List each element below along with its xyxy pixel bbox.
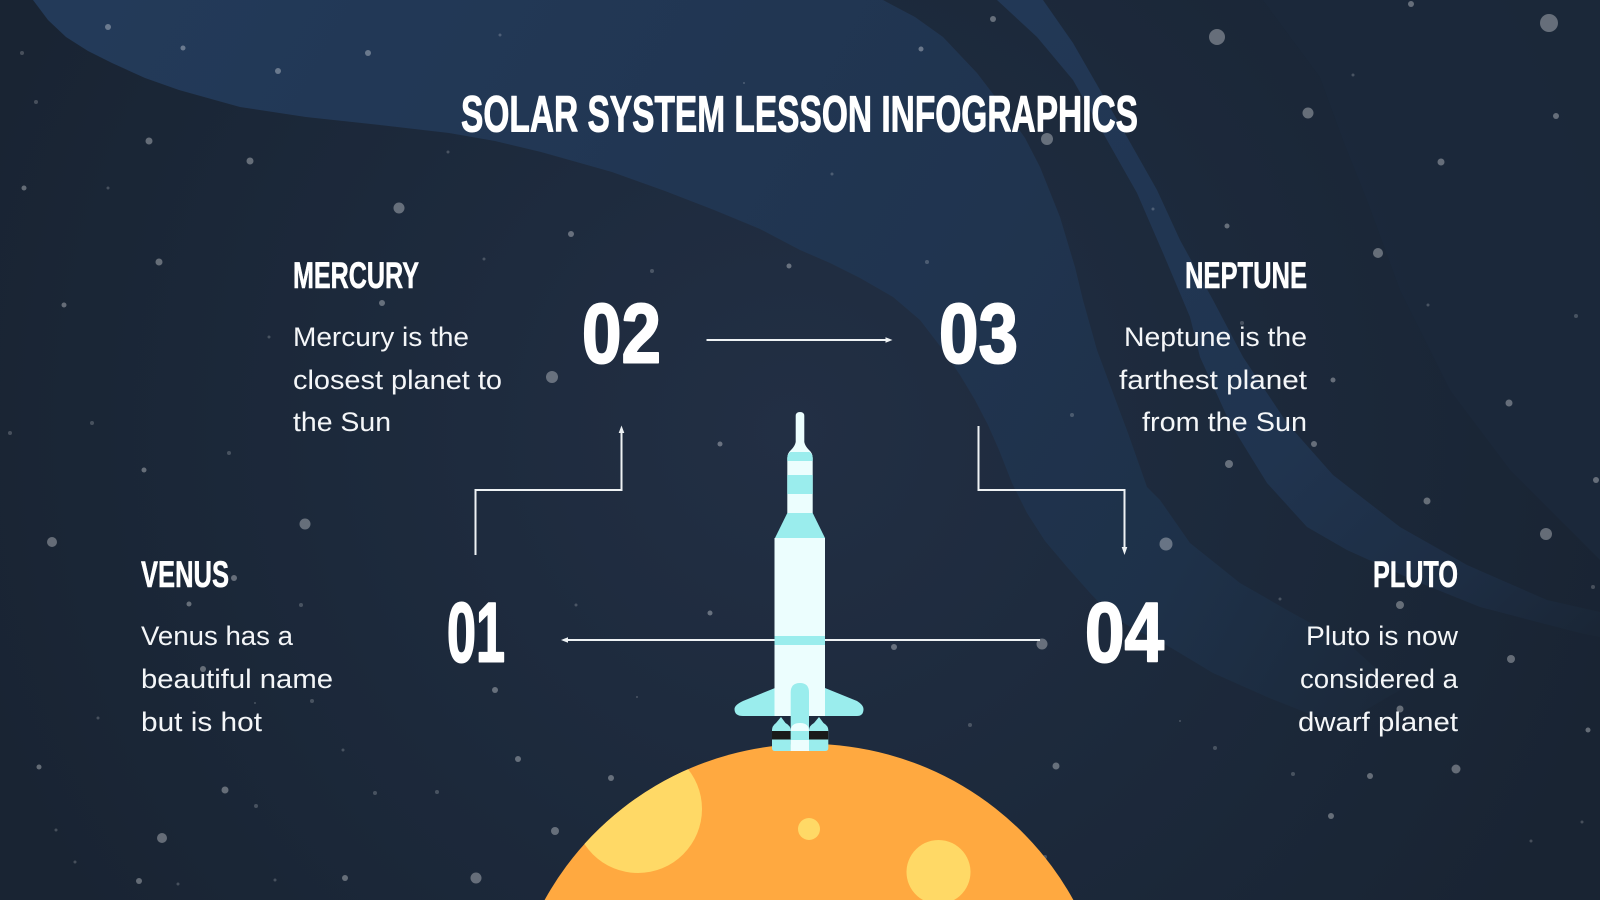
panel: Mercury xyxy=(293,255,502,437)
planet xyxy=(545,744,1073,900)
heading: Neptune: NEPTUNE xyxy=(1185,255,1307,296)
planet crater: medium xyxy=(906,840,971,900)
rocket upper stripes xyxy=(787,452,813,494)
heading: Mercury: MERCURY xyxy=(293,255,419,296)
arrow: 04 to 01 xyxy=(561,637,1040,643)
background wave: main swirl xyxy=(33,0,1400,722)
number 03: 03 xyxy=(939,286,1018,380)
number 04: 04 xyxy=(1085,586,1164,680)
text: Pluto description xyxy=(1298,621,1459,737)
arrow: 01 to 02 xyxy=(476,426,624,555)
title: SOLAR SYSTEM LESSON INFOGRAPHICS xyxy=(461,86,1138,142)
rocket body xyxy=(774,538,825,716)
rocket xyxy=(734,412,864,751)
text: Pluto description: dwarf planet xyxy=(1298,707,1459,737)
planet crater: large xyxy=(584,769,702,873)
arrow: 02 to 03 xyxy=(706,337,892,343)
panel: Pluto xyxy=(1298,554,1459,737)
rocket cone xyxy=(775,513,825,538)
text: Venus description: Venus has a xyxy=(141,621,294,651)
text: Pluto description: Pluto is now xyxy=(1306,621,1459,651)
text: Neptune description: farthest planet xyxy=(1119,365,1308,395)
text: Neptune description xyxy=(1119,322,1308,437)
rocket centre tube xyxy=(791,683,809,751)
rocket nose and upper stage xyxy=(787,412,813,513)
text: Neptune description: Neptune is the xyxy=(1124,322,1307,352)
number 01: 01 xyxy=(447,586,505,680)
rocket fins xyxy=(734,688,864,716)
panel: Neptune xyxy=(1119,255,1308,437)
text: Venus description xyxy=(141,621,333,737)
rocket right thruster xyxy=(809,717,828,751)
planet crater: small xyxy=(798,818,820,840)
text: Venus description: beautiful name xyxy=(141,664,333,694)
number 02: 02 xyxy=(582,286,661,380)
heading: Pluto: PLUTO xyxy=(1373,554,1458,595)
text: Mercury description: Mercury is the xyxy=(293,322,469,352)
heading: Venus: VENUS xyxy=(141,554,229,595)
background wave: ribbon xyxy=(997,0,1600,637)
panel: Venus xyxy=(141,554,333,737)
text: Neptune description: from the Sun xyxy=(1142,407,1307,437)
text: Venus description: but is hot xyxy=(141,707,263,737)
arrow: 03 to 04 xyxy=(978,426,1127,555)
text: Pluto description: considered a xyxy=(1300,664,1459,694)
background wave: faint right band xyxy=(1263,0,1600,560)
text: Mercury description: closest planet to xyxy=(293,365,502,395)
text: Mercury description xyxy=(293,322,502,437)
rocket body band xyxy=(774,636,825,645)
rocket left thruster xyxy=(772,717,791,751)
text: Mercury description: the Sun xyxy=(293,407,391,437)
